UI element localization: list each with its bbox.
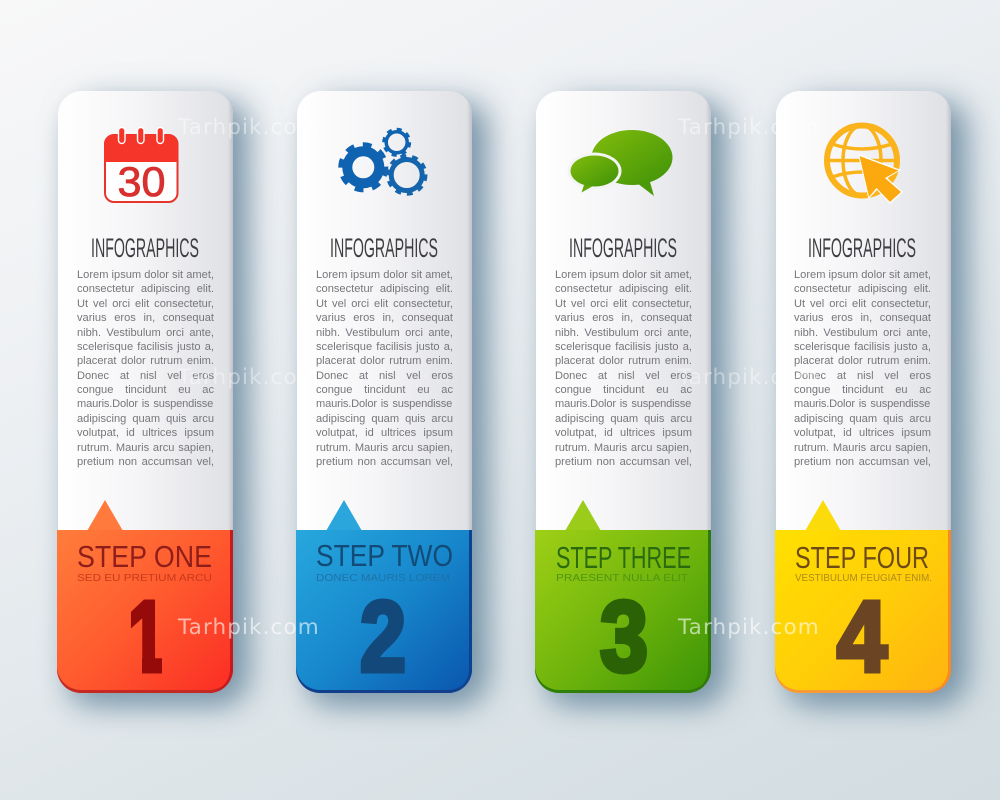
text block: consectetur adipiscing elit. bbox=[316, 283, 453, 295]
text block: nibh. Vestibulum orci ante, bbox=[316, 326, 453, 338]
text block: adipiscing quam quis arcu bbox=[316, 413, 453, 425]
text block: scelerisque facilisis justo a, bbox=[77, 341, 214, 353]
watermark top left: Tarhpik.com bbox=[178, 115, 320, 140]
text block bbox=[77, 269, 214, 468]
step title: STEP THREE bbox=[556, 540, 691, 575]
text block: Lorem ipsum dolor sit amet, bbox=[316, 269, 453, 281]
text block: Donec at nisl vel eros bbox=[555, 370, 692, 382]
text block: congue tincidunt eu ac bbox=[555, 384, 692, 396]
step number: 1 bbox=[128, 581, 166, 693]
text block: placerat dolor rutrum enim. bbox=[555, 355, 692, 367]
step number: 4 bbox=[837, 581, 887, 693]
step title: STEP ONE bbox=[77, 539, 212, 574]
card: step one bbox=[48, 78, 273, 726]
text block: rutrum. Mauris arcu sapien, bbox=[77, 442, 214, 454]
text block: consectetur adipiscing elit. bbox=[77, 283, 214, 295]
step title: STEP FOUR bbox=[795, 540, 929, 575]
text block: volutpat, id ultrices ipsum bbox=[794, 427, 931, 439]
text block: nibh. Vestibulum orci ante, bbox=[555, 326, 692, 338]
panel: step four bbox=[775, 530, 951, 693]
card: step three bbox=[526, 78, 750, 726]
text block bbox=[316, 269, 453, 468]
heading: INFOGRAPHICS bbox=[91, 233, 199, 263]
text block: Ut vel orci elit consectetur, bbox=[794, 298, 931, 310]
icon: calendar: 30 bbox=[118, 158, 166, 205]
step subtitle: VESTIBULUM FEUGIAT ENIM. bbox=[795, 572, 932, 584]
text block: rutrum. Mauris arcu sapien, bbox=[555, 442, 692, 454]
pointer triangle bbox=[326, 500, 362, 531]
watermark middle right: Tarhpik.com bbox=[678, 365, 820, 390]
card: step two bbox=[287, 78, 512, 726]
text block: Donec at nisl vel eros bbox=[316, 370, 453, 382]
text block: placerat dolor rutrum enim. bbox=[794, 355, 931, 367]
icon: calendar bbox=[104, 127, 178, 205]
step title: STEP TWO bbox=[316, 538, 453, 573]
text block: Lorem ipsum dolor sit amet, bbox=[794, 269, 931, 281]
text block: pretium non accumsan vel, bbox=[316, 456, 453, 468]
text block: mauris.Dolor is suspendisse bbox=[77, 398, 213, 410]
watermark middle left: Tarhpik.com bbox=[178, 365, 320, 390]
text block: varius eros in, consequat bbox=[316, 312, 453, 324]
heading: INFOGRAPHICS bbox=[330, 233, 438, 263]
icon: gears bbox=[338, 128, 428, 196]
text block: scelerisque facilisis justo a, bbox=[555, 341, 692, 353]
text block: adipiscing quam quis arcu bbox=[77, 413, 214, 425]
watermark bottom left: Tarhpik.com bbox=[178, 615, 320, 640]
text block: rutrum. Mauris arcu sapien, bbox=[316, 442, 453, 454]
text block: pretium non accumsan vel, bbox=[555, 456, 692, 468]
text block: rutrum. Mauris arcu sapien, bbox=[794, 442, 931, 454]
watermark bottom right: Tarhpik.com bbox=[678, 615, 820, 640]
text block: mauris.Dolor is suspendisse bbox=[555, 398, 691, 410]
text block: varius eros in, consequat bbox=[555, 312, 692, 324]
text block: scelerisque facilisis justo a, bbox=[316, 341, 453, 353]
icon: speech bubbles bbox=[570, 130, 672, 196]
text block: congue tincidunt eu ac bbox=[316, 384, 453, 396]
text block: congue tincidunt eu ac bbox=[77, 384, 214, 396]
text block: varius eros in, consequat bbox=[794, 312, 931, 324]
text block: volutpat, id ultrices ipsum bbox=[316, 427, 453, 439]
text block: Donec at nisl vel eros bbox=[794, 370, 931, 382]
text block: volutpat, id ultrices ipsum bbox=[77, 427, 214, 439]
text block: mauris.Dolor is suspendisse bbox=[794, 398, 930, 410]
text block: placerat dolor rutrum enim. bbox=[316, 355, 453, 367]
pointer triangle bbox=[805, 500, 841, 531]
text block bbox=[555, 269, 692, 468]
text block: consectetur adipiscing elit. bbox=[794, 283, 931, 295]
text block: Ut vel orci elit consectetur, bbox=[316, 298, 453, 310]
text block: mauris.Dolor is suspendisse bbox=[316, 398, 452, 410]
text block: Lorem ipsum dolor sit amet, bbox=[77, 269, 214, 281]
step subtitle: DONEC MAURIS LOREM bbox=[316, 572, 450, 584]
text block: nibh. Vestibulum orci ante, bbox=[77, 326, 214, 338]
text block: congue tincidunt eu ac bbox=[794, 384, 931, 396]
icon: globe with cursor bbox=[824, 122, 903, 204]
text block: Ut vel orci elit consectetur, bbox=[555, 298, 692, 310]
text block: Ut vel orci elit consectetur, bbox=[77, 298, 214, 310]
text block: placerat dolor rutrum enim. bbox=[77, 355, 214, 367]
step subtitle: PRAESENT NULLA ELIT bbox=[556, 572, 689, 584]
step number: 2 bbox=[360, 581, 406, 693]
text block bbox=[794, 269, 931, 468]
panel: step one bbox=[57, 530, 233, 693]
text block: volutpat, id ultrices ipsum bbox=[555, 427, 692, 439]
panel: step three bbox=[535, 530, 711, 693]
step number: 3 bbox=[600, 581, 648, 693]
text block: adipiscing quam quis arcu bbox=[794, 413, 931, 425]
text block: pretium non accumsan vel, bbox=[77, 456, 214, 468]
pointer triangle bbox=[565, 500, 601, 531]
text block: consectetur adipiscing elit. bbox=[555, 283, 692, 295]
text block: nibh. Vestibulum orci ante, bbox=[794, 326, 931, 338]
watermark top right: Tarhpik.com bbox=[678, 115, 820, 140]
pointer triangle bbox=[87, 500, 123, 531]
text block: Donec at nisl vel eros bbox=[77, 370, 214, 382]
heading: INFOGRAPHICS bbox=[569, 233, 677, 263]
text block: varius eros in, consequat bbox=[77, 312, 214, 324]
text block: pretium non accumsan vel, bbox=[794, 456, 931, 468]
text block: adipiscing quam quis arcu bbox=[555, 413, 692, 425]
text block: scelerisque facilisis justo a, bbox=[794, 341, 931, 353]
card: step four bbox=[766, 80, 990, 726]
panel: step two bbox=[296, 530, 472, 693]
text block: Lorem ipsum dolor sit amet, bbox=[555, 269, 692, 281]
step subtitle: SED EU PRETIUM ARCU bbox=[77, 572, 212, 584]
